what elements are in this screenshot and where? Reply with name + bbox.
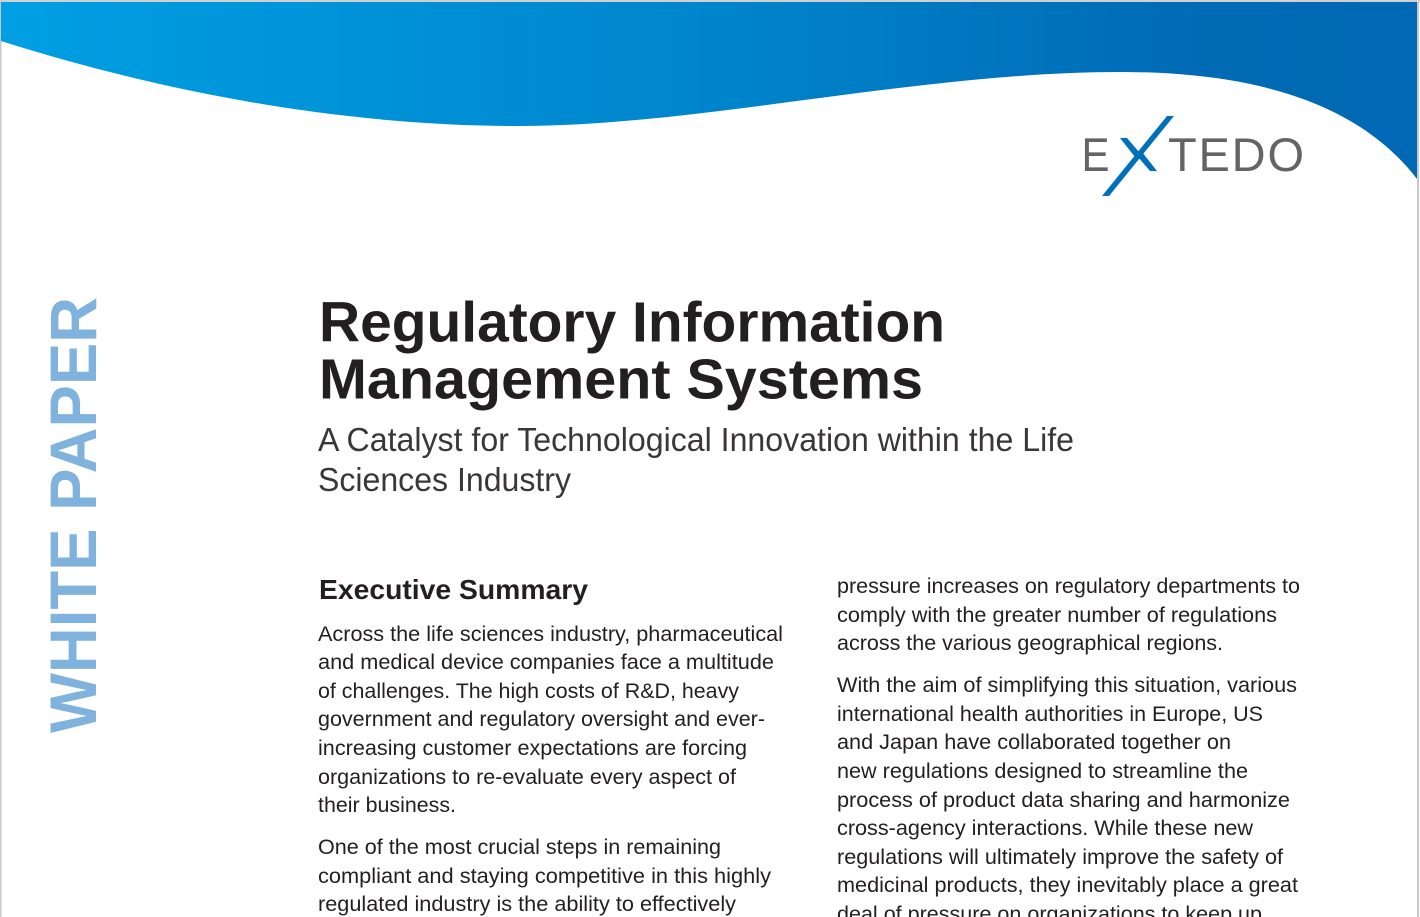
body text: left column, second paragraph: One of the most crucial steps in remaining xyxy=(318,835,721,859)
body text: right column, second paragraph: process of product data sharing and harmonize xyxy=(837,788,1290,812)
body text: left column, first paragraph: of challenges. The high costs of R&D, heavy xyxy=(318,679,739,703)
body text: left column, first paragraph: increasing customer expectations are forcing xyxy=(318,736,747,760)
heading: executive summary: Executive Summary xyxy=(319,574,588,605)
logo: EXTEDO: TEDO xyxy=(1168,128,1304,181)
side label: white paper: WHITE PAPER xyxy=(36,297,110,733)
body text: left column, first paragraph: their business. xyxy=(318,793,456,817)
body text: left column, first paragraph: organizations to re-evaluate every aspect of xyxy=(318,765,736,789)
body text: left column, second paragraph: regulated industry is the ability to effectively xyxy=(318,892,736,916)
body text: left column, first paragraph xyxy=(318,622,783,817)
body text: left column, first paragraph: and medical device companies face a multitude xyxy=(318,650,774,674)
title: Management Systems xyxy=(319,348,923,412)
body text: right column, second paragraph: and Japan have collaborated together on xyxy=(837,730,1231,754)
body text: left column, second paragraph xyxy=(318,835,771,916)
body text: right column, second paragraph xyxy=(837,673,1298,917)
logo: EXTEDO xyxy=(1082,116,1304,196)
logo: EXTEDO: E xyxy=(1082,128,1110,181)
body text: right column, first paragraph: across the various geographical regions. xyxy=(837,631,1223,655)
title: Regulatory Information xyxy=(319,290,945,354)
subtitle xyxy=(318,422,1074,499)
body text: right column, second paragraph: new regulations designed to streamline the xyxy=(837,759,1248,783)
body text: right column, first paragraph: comply with the greater number of regulations xyxy=(837,603,1277,627)
body text: right column, second paragraph: regulations will ultimately improve the safety of xyxy=(837,845,1283,869)
subtitle: Sciences Industry xyxy=(318,462,571,499)
body text: right column, second paragraph: cross-agency interactions. While these new xyxy=(837,816,1253,840)
body text: right column, second paragraph: With the aim of simplifying this situation, various xyxy=(837,673,1297,697)
body text: left column, first paragraph: Across the life sciences industry, pharmaceutical xyxy=(318,622,783,646)
header wave banner xyxy=(1,2,1417,179)
body text: left column, second paragraph: compliant and staying competitive in this highly xyxy=(318,864,771,888)
body text: left column, first paragraph: government and regulatory oversight and ever- xyxy=(318,707,765,731)
subtitle: A Catalyst for Technological Innovation within the Life xyxy=(318,422,1074,459)
title xyxy=(319,290,945,412)
body text: right column, first paragraph xyxy=(837,574,1300,655)
body text: right column, first paragraph: pressure increases on regulatory departments to xyxy=(837,574,1300,598)
body text: right column, second paragraph: international health authorities in Europe, US xyxy=(837,702,1263,726)
body text: right column, second paragraph: medicinal products, they inevitably place a great xyxy=(837,873,1298,897)
